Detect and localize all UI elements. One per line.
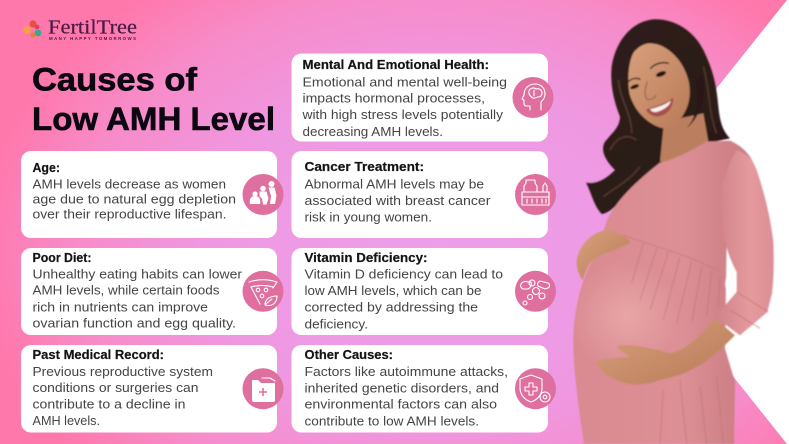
panel: mental and emotional health: impacts hormonal processes, bbox=[302, 90, 485, 106]
sleeve bbox=[715, 150, 774, 335]
icon: vitamin pills bbox=[515, 271, 556, 312]
icon: flower logo bbox=[23, 20, 41, 38]
panel: other causes: inherited genetic disorders, and bbox=[304, 380, 499, 396]
arm gap bbox=[725, 274, 736, 294]
logo bbox=[23, 16, 137, 41]
logo tagline: MANY HAPPY TOMORROWS bbox=[49, 36, 136, 41]
panel: cancer treatment: associated with breast cancer bbox=[304, 193, 491, 208]
panel: poor diet bbox=[21, 248, 284, 335]
panel: other causes bbox=[292, 345, 556, 432]
title: Causes of bbox=[32, 62, 197, 98]
panel: mental and emotional health: Mental And Emotional Health: bbox=[302, 57, 489, 72]
panel: vitamin deficiency: corrected by addressing the bbox=[304, 300, 478, 314]
panel: cancer treatment bbox=[292, 151, 556, 238]
panel: past medical record bbox=[21, 345, 284, 432]
panel: past medical record: Previous reproductive system bbox=[32, 364, 213, 379]
icon: head with brain bbox=[512, 77, 554, 118]
dress body bbox=[573, 141, 757, 444]
panel: poor diet: Poor Diet: bbox=[32, 250, 92, 265]
panel: mental and emotional health: decreasing AMH levels. bbox=[302, 124, 443, 139]
title bbox=[32, 62, 275, 137]
panel: past medical record: contribute to a decline in bbox=[32, 396, 186, 412]
panel: age: AMH levels decrease as women bbox=[32, 176, 226, 192]
hair back bbox=[586, 19, 730, 214]
panel: mental and emotional health: with high stress levels potentially bbox=[301, 107, 504, 122]
panel: age: Age: bbox=[32, 160, 60, 175]
panel: age bbox=[21, 151, 284, 238]
lower arm and hand bbox=[596, 318, 735, 384]
panel: cancer treatment: Abnormal AMH levels may be bbox=[304, 176, 484, 192]
neck and chest bbox=[660, 113, 708, 163]
panel: mental and emotional health: Emotional and mental well-being bbox=[302, 74, 507, 90]
panel: poor diet: Unhealthy eating habits can lower bbox=[32, 266, 243, 282]
panel: age: over their reproductive lifespan. bbox=[32, 206, 226, 222]
panel: vitamin deficiency: Vitamin D deficiency can lead to bbox=[304, 266, 503, 282]
panel: past medical record: conditions or surgeries can bbox=[32, 380, 198, 395]
face bbox=[626, 43, 690, 129]
icon: family figures bbox=[242, 174, 284, 215]
panel: vitamin deficiency: Vitamin Deficiency: bbox=[304, 250, 428, 265]
panel: vitamin deficiency bbox=[292, 248, 556, 335]
brows and eyes bbox=[628, 63, 668, 90]
icon: medical folder bbox=[242, 368, 284, 409]
panel: poor diet: rich in nutrients can improve bbox=[32, 300, 208, 314]
white corner shape bbox=[610, 0, 789, 444]
panel: poor diet: ovarian function and egg quality. bbox=[32, 316, 236, 330]
panel: past medical record: AMH levels. bbox=[32, 413, 100, 428]
panel: other causes: environmental factors can also bbox=[304, 396, 497, 412]
cuff fold bbox=[730, 292, 768, 328]
logo wordmark: FertilTree bbox=[48, 16, 137, 38]
title: Low AMH Level bbox=[32, 101, 275, 137]
upper hand bbox=[577, 230, 631, 281]
icon: shield with cross and gear bbox=[515, 368, 556, 409]
panel: other causes: Other Causes: bbox=[304, 347, 393, 362]
panel: cancer treatment: Cancer Treatment: bbox=[304, 159, 424, 174]
icon: medicine bottle and blister pack bbox=[515, 174, 556, 215]
panel: past medical record: Past Medical Record: bbox=[32, 347, 164, 362]
hair highlights bbox=[603, 67, 717, 197]
panel: vitamin deficiency: deficiency. bbox=[304, 316, 368, 332]
panel: age: age due to natural egg depletion bbox=[32, 192, 236, 206]
panel: other causes: Factors like autoimmune attacks, bbox=[304, 364, 508, 379]
panel: cancer treatment: risk in young women. bbox=[304, 210, 432, 224]
smile bbox=[646, 97, 673, 117]
icon: pizza slice and leaf bbox=[242, 271, 284, 312]
illustration: pregnant woman bbox=[570, 19, 774, 444]
panel: mental and emotional health bbox=[292, 54, 554, 142]
belly highlight bbox=[570, 260, 683, 373]
panel: other causes: contribute to low AMH levels. bbox=[304, 414, 479, 428]
panel: vitamin deficiency: low AMH levels, which can be bbox=[304, 283, 482, 298]
waist seam and gathers bbox=[623, 235, 723, 444]
front hair bbox=[623, 28, 704, 128]
nose shadow bbox=[645, 82, 656, 99]
panel: poor diet: AMH levels, while certain foods bbox=[32, 282, 220, 298]
